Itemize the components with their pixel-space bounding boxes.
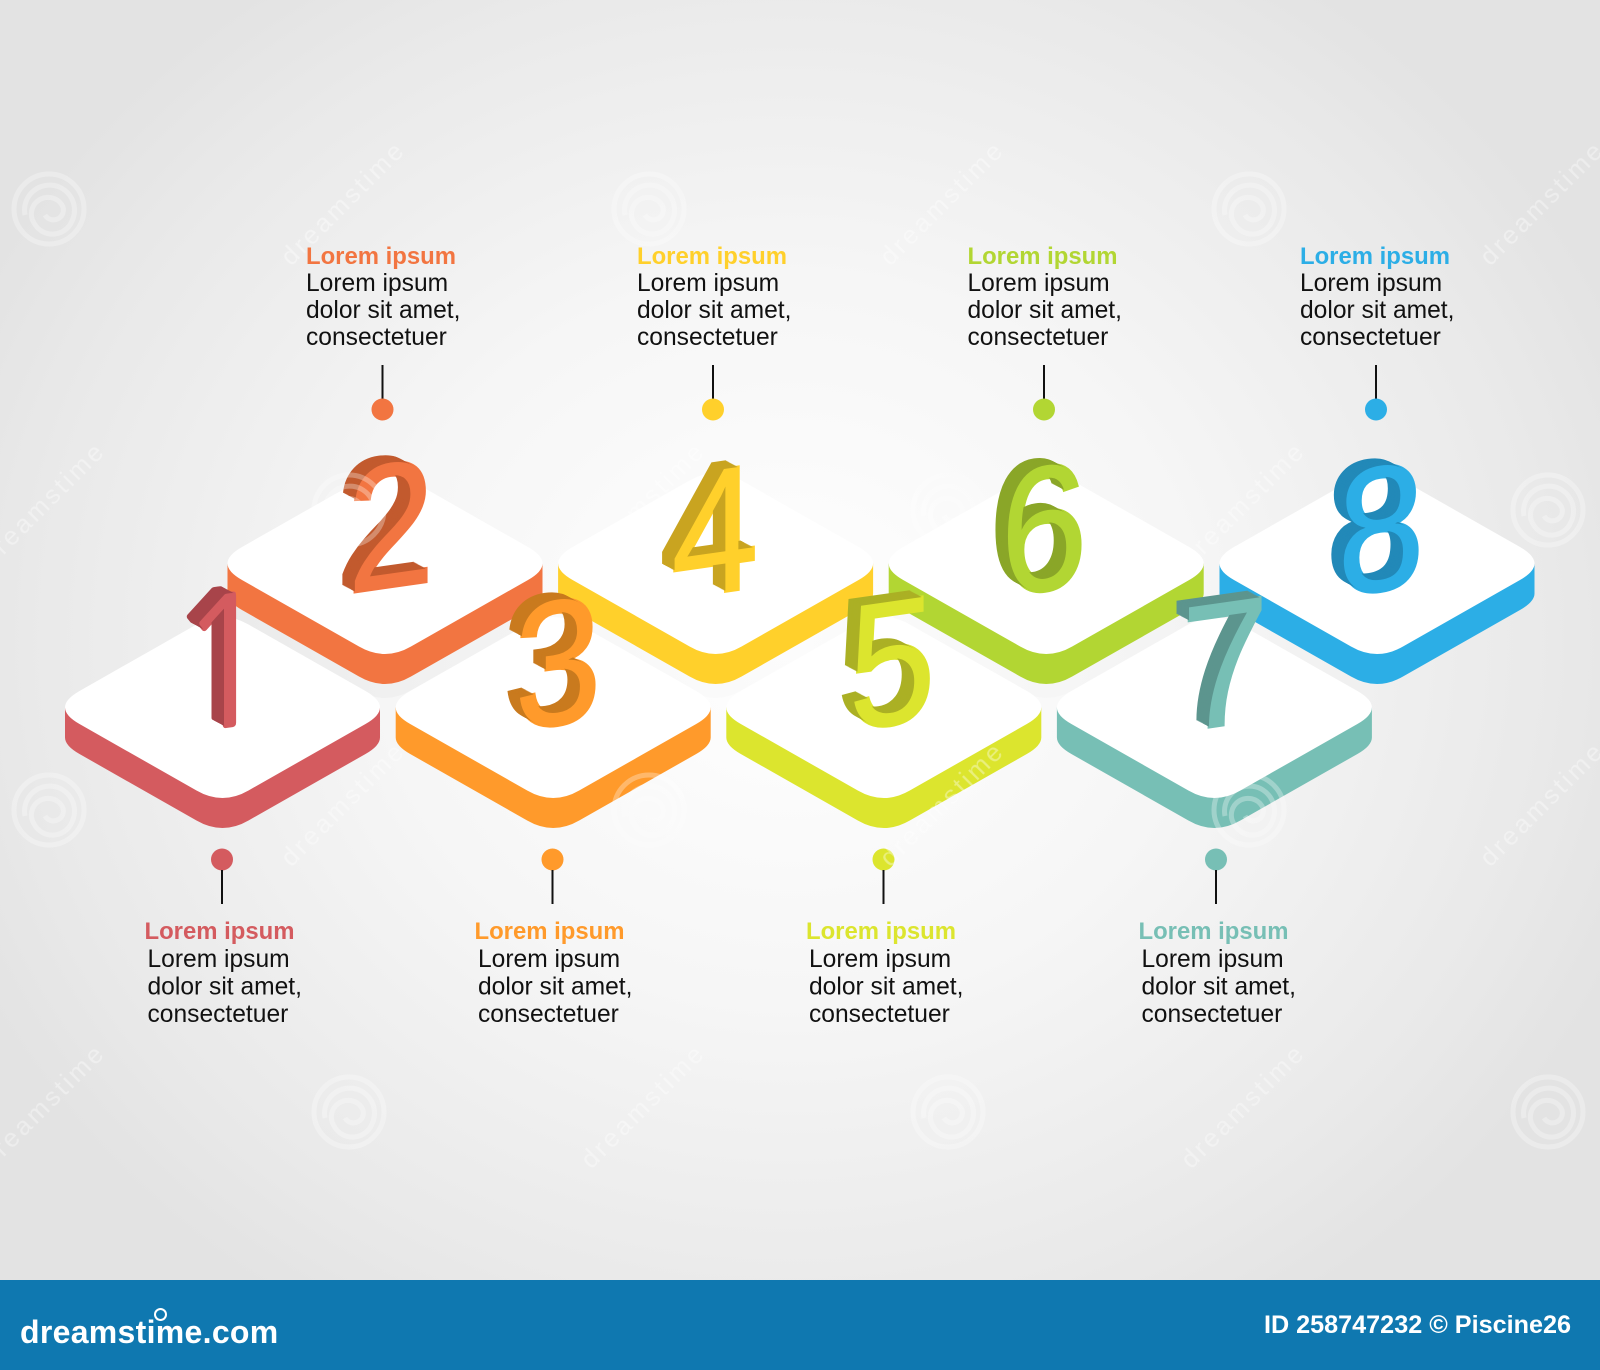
label: step 5: Lorem ipsum bbox=[806, 918, 956, 945]
watermark overlay: dreamstime bbox=[1174, 1037, 1311, 1174]
watermark overlay: dreamstime bbox=[274, 735, 411, 872]
label: step 2: Lorem ipsum bbox=[306, 270, 448, 297]
tile 7 bbox=[1057, 617, 1372, 828]
label: step 4 bbox=[637, 243, 791, 420]
label: step 4: Lorem ipsum bbox=[637, 270, 779, 297]
label: step 7: dolor sit amet, bbox=[1142, 974, 1296, 1000]
watermark overlay: dreamstime bbox=[873, 735, 1010, 872]
label: step 3: consectetuer bbox=[478, 1001, 619, 1028]
label: step 6: Lorem ipsum bbox=[968, 270, 1110, 297]
label: step 8: Lorem ipsum bbox=[1300, 243, 1450, 270]
label: step 1: Lorem ipsum bbox=[144, 918, 295, 945]
tile 6 bbox=[889, 473, 1204, 698]
label: step 5: dolor sit amet, bbox=[809, 974, 963, 1000]
label: step 3: Lorem ipsum bbox=[478, 946, 620, 973]
label: step 8 bbox=[1300, 243, 1454, 420]
tile 1 bbox=[65, 617, 380, 828]
label: step 2: Lorem ipsum bbox=[306, 243, 456, 270]
label: step 2: consectetuer bbox=[306, 324, 447, 351]
footer bar bbox=[0, 1280, 1600, 1370]
number 1: 1 bbox=[177, 568, 272, 759]
label: step 5 bbox=[806, 848, 963, 1028]
number 8: 8 bbox=[1337, 423, 1424, 634]
label: step 6 bbox=[968, 243, 1122, 420]
watermark overlay: dreamstime bbox=[873, 134, 1010, 271]
footer logo: dreamstime.com bbox=[20, 1314, 279, 1350]
label: step 8: dolor sit amet, bbox=[1300, 297, 1454, 324]
tile 8 bbox=[1220, 473, 1534, 684]
label: step 6: consectetuer bbox=[968, 324, 1108, 351]
footer logo spiral bbox=[154, 1308, 167, 1321]
label: step 6: Lorem ipsum bbox=[968, 243, 1118, 270]
label: step 7 bbox=[1138, 848, 1296, 1028]
number 2: 2 bbox=[347, 420, 434, 631]
tile 3 bbox=[396, 617, 711, 828]
watermark overlay: dreamstime bbox=[574, 435, 711, 572]
label: step 7: Lorem ipsum bbox=[1142, 946, 1284, 973]
number 6: 6 bbox=[1000, 423, 1087, 634]
label: step 3: dolor sit amet, bbox=[478, 974, 632, 1000]
label: step 7: consectetuer bbox=[1142, 1001, 1282, 1028]
footer credit: ID 258747232 © Piscine26 bbox=[1264, 1311, 1571, 1339]
label: step 4: consectetuer bbox=[637, 324, 778, 351]
label: step 8: consectetuer bbox=[1300, 324, 1441, 351]
label: step 7: Lorem ipsum bbox=[1138, 918, 1289, 945]
label: step 1: consectetuer bbox=[148, 1001, 288, 1028]
label: step 6: dolor sit amet, bbox=[968, 297, 1122, 324]
label: step 3 bbox=[474, 848, 632, 1028]
number 5: 5 bbox=[848, 557, 935, 768]
number 3: 3 bbox=[514, 557, 601, 768]
label: step 4: dolor sit amet, bbox=[637, 297, 791, 324]
watermark overlay: dreamstime bbox=[1174, 435, 1311, 572]
tile 5 bbox=[726, 617, 1041, 828]
label: step 2: dolor sit amet, bbox=[306, 297, 460, 324]
label: step 1: Lorem ipsum bbox=[148, 946, 290, 973]
number 7: 7 bbox=[1181, 558, 1268, 769]
watermark overlay: dreamstime bbox=[274, 134, 411, 271]
label: step 1 bbox=[144, 848, 302, 1028]
label: step 2 bbox=[306, 243, 460, 420]
label: step 4: Lorem ipsum bbox=[637, 243, 787, 270]
label: step 3: Lorem ipsum bbox=[474, 918, 625, 945]
watermark overlay: dreamstime bbox=[574, 1037, 711, 1174]
label: step 8: Lorem ipsum bbox=[1300, 270, 1442, 297]
tile 4 bbox=[558, 473, 873, 698]
number 4: 4 bbox=[671, 426, 758, 637]
label: step 5: Lorem ipsum bbox=[809, 946, 951, 973]
label: step 1: dolor sit amet, bbox=[148, 974, 302, 1000]
label: step 5: consectetuer bbox=[809, 1001, 950, 1028]
tile 2 bbox=[228, 473, 542, 698]
